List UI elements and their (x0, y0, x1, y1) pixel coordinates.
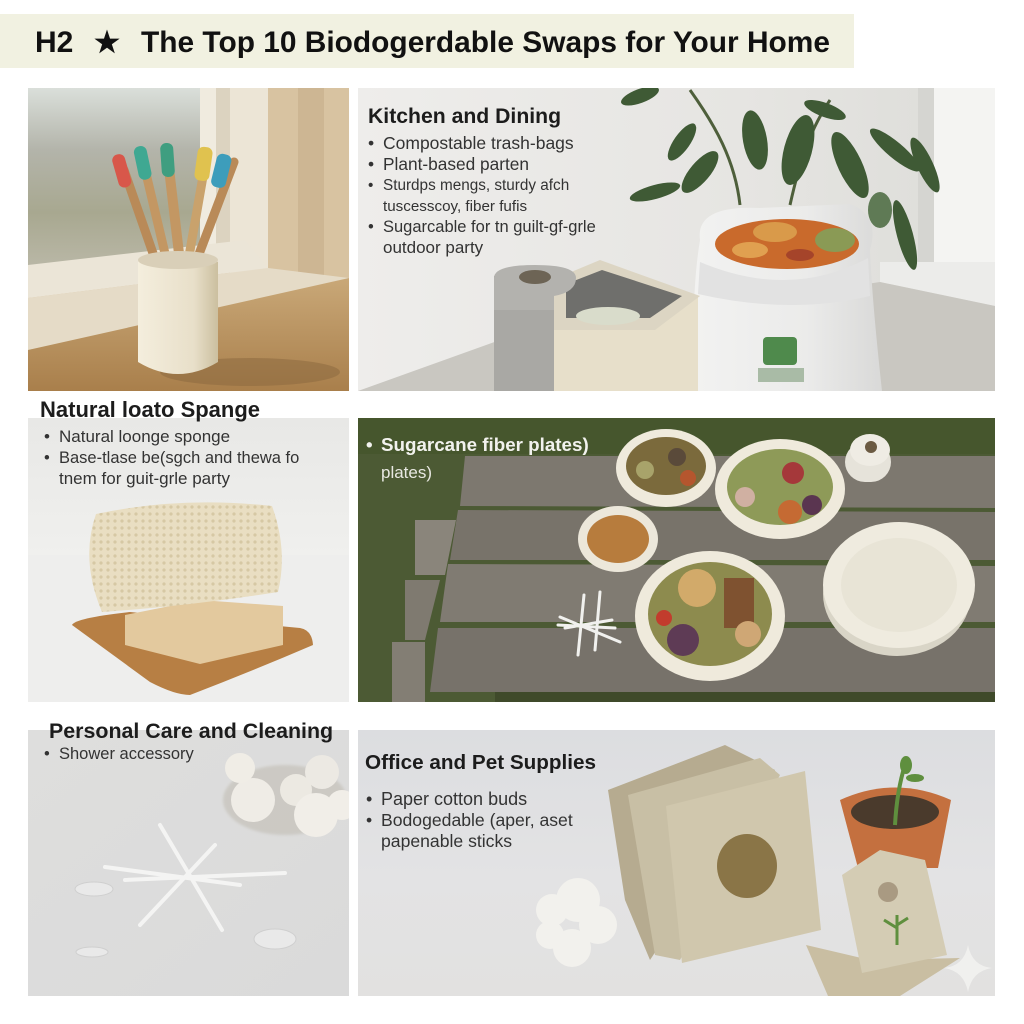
text: shower accessory: • (44, 745, 50, 763)
list: kitchen items: Sugarcable for tn guilt-gf-grle (383, 218, 596, 236)
title banner: The Top 10 Biodogerdable Swaps for Your Home (141, 26, 830, 59)
text: sponge list (44, 427, 299, 488)
icon: cotton flowers (223, 753, 357, 837)
panel: personal care and cleaning (28, 730, 357, 996)
icon: ceramic cup (138, 251, 218, 374)
text: office list: Bodogedable (aper, aset (381, 810, 573, 830)
text: sponge list: Natural loonge sponge (59, 427, 230, 446)
label: sugarcane fiber plates: • (366, 434, 373, 455)
icon: sparkle watermark (944, 945, 992, 992)
list: kitchen items: Sturdps mengs, sturdy afch (383, 177, 569, 194)
list: kitchen items: • (368, 177, 373, 194)
text: office list (366, 789, 573, 851)
icon: water drops (75, 882, 296, 957)
icon: potted plant leaves (619, 83, 945, 272)
list: kitchen items: • (368, 133, 374, 153)
heading: natural loato sponge: Natural loato Spange (40, 397, 260, 422)
text: office list: • (366, 789, 372, 809)
panel: bamboo toothbrushes (28, 88, 349, 391)
icon: large salad bowl (715, 439, 845, 539)
icon: wooden soap dish (72, 612, 313, 695)
icon: compostable trash bag (694, 204, 882, 391)
label: sugarcane fiber plates (366, 434, 589, 482)
heading: kitchen and dining: Kitchen and Dining (368, 105, 561, 128)
icon: small salad bowl (616, 429, 716, 507)
text: sponge list: • (44, 449, 50, 467)
picnic table (430, 456, 995, 702)
list: kitchen items: tuscesscoy, fiber fufis (383, 198, 527, 215)
text: sponge list: tnem for guit-grle party (59, 469, 231, 488)
title banner: ★ (94, 27, 120, 59)
list: kitchen items: • (368, 154, 374, 174)
panel: office and pet supplies (358, 730, 995, 996)
icon: terracotta pot with seedling (840, 756, 951, 868)
icon: seed paper cards (608, 745, 821, 963)
list: kitchen items: Plant-based parten (383, 154, 529, 174)
list: kitchen items (368, 133, 596, 257)
icon: plate stack (823, 522, 975, 656)
icon: soap bar (125, 600, 283, 664)
icon: twine roll (845, 434, 891, 482)
icon: large meal bowl (635, 551, 785, 681)
icon: compost bin (552, 260, 700, 391)
icon: cotton swabs (558, 592, 620, 655)
list: kitchen items: outdoor party (383, 238, 484, 257)
heading: personal care and cleaning: Personal Care and Cleaning (49, 719, 333, 743)
icon: paper roll (494, 265, 576, 391)
list: kitchen items: • (368, 218, 374, 236)
title banner: H2 (35, 26, 73, 59)
panel: natural loofah sponge (28, 418, 349, 702)
label: sugarcane fiber plates: Sugarcane fiber plates) (381, 434, 589, 455)
label: sugarcane fiber plates: plates) (381, 463, 432, 482)
icon: toothbrushes (111, 143, 234, 262)
text: office list: • (366, 810, 372, 830)
heading: office and pet supplies: Office and Pet Supplies (365, 751, 596, 774)
text: shower accessory: Shower accessory (59, 745, 195, 763)
text: sponge list: Base-tlase be(sgch and thewa fo (59, 449, 299, 467)
panel: kitchen and dining (358, 83, 995, 391)
panel: sugarcane fiber plates (358, 418, 995, 702)
title banner (0, 14, 854, 68)
icon: seed paper tag (806, 850, 960, 996)
icon: snack bowl (578, 506, 658, 572)
text: office list: Paper cotton buds (381, 789, 527, 809)
icon: loofah sponge (89, 502, 282, 612)
list: kitchen items: Compostable trash-bags (383, 133, 574, 153)
text: sponge list: • (44, 427, 50, 446)
text: office list: papenable sticks (381, 831, 512, 851)
icon: cotton boll (536, 878, 617, 967)
icon: scattered cotton swabs (105, 825, 285, 930)
